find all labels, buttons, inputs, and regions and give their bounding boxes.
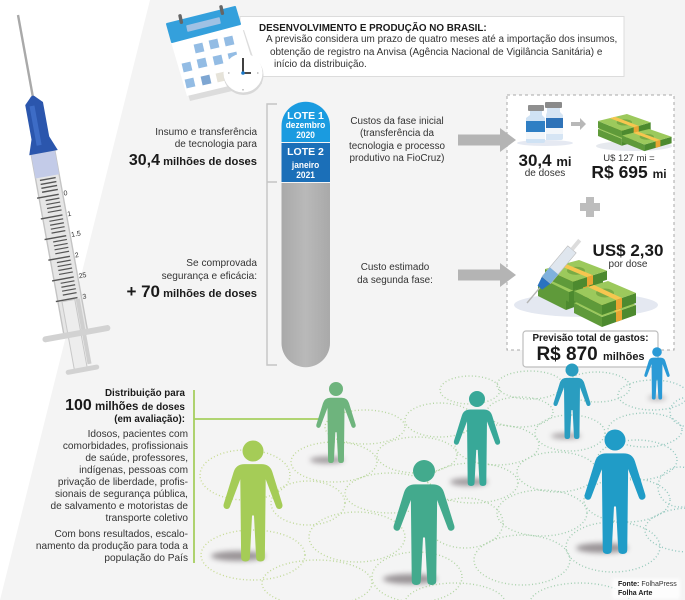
vaccine tube — [282, 102, 330, 367]
label: first phase costs: (transferência da — [360, 128, 434, 139]
arrow: second phase — [458, 263, 516, 287]
person: small blue top right — [644, 347, 670, 400]
dashed cost panel — [507, 95, 674, 350]
figure: first phase cost: R$ 695 mi — [591, 162, 667, 182]
label: first lot doses: Insumo e transferência — [155, 126, 257, 138]
figure: first phase cost — [591, 153, 667, 182]
label: second phase costs: da segunda fase: — [357, 275, 433, 286]
person: green large — [211, 440, 283, 562]
syringe — [0, 9, 117, 378]
small arrow — [571, 118, 586, 130]
figure: cost per dose: US$ 2,30 — [593, 241, 663, 260]
person: green small — [310, 382, 356, 464]
text: production scaling: Com bons resultados, escalo- — [54, 529, 188, 540]
label: second lot doses — [126, 258, 257, 301]
source: Fonte: FolhaPress — [618, 581, 677, 588]
label: first lot doses — [129, 126, 258, 168]
label: first phase costs — [349, 116, 445, 164]
figure: doses: de doses — [525, 168, 565, 179]
figure: total cost: Previsão total de gastos: — [533, 333, 648, 344]
text: priority groups: transporte coletivo — [106, 513, 188, 524]
person: blue large — [576, 430, 645, 554]
text box: development and production: DESENVOLVIMENTO E PRODUÇÃO NO BRASIL: — [259, 23, 487, 34]
label: first phase costs: produtivo na FioCruz) — [350, 153, 444, 164]
person: blue upper middle — [551, 364, 591, 439]
tube label: lot 1: LOTE 1 — [287, 110, 324, 122]
tube label: lot 2 — [287, 146, 324, 180]
figure: first phase cost: U$ 127 mi = — [603, 153, 655, 164]
tube label: lot 1: 2020 — [296, 130, 315, 141]
figure: total cost: R$ 870 milhões — [536, 344, 645, 365]
syringe: 2 — [74, 252, 80, 260]
text: priority groups: de salvamento e motoristas de — [51, 501, 188, 512]
text: production scaling: namento da produção para toda a — [36, 541, 188, 552]
tube label: lot 2: janeiro — [292, 160, 319, 171]
syringe: 3 — [82, 293, 87, 301]
icon: calendar with clock — [167, 5, 264, 101]
total cost box — [523, 331, 658, 367]
label: second phase costs — [357, 262, 433, 286]
label: first phase costs: tecnologia e processo — [349, 141, 445, 152]
tube label: lot 2: 2021 — [296, 170, 315, 180]
bracket — [267, 104, 277, 365]
syringe: 25 — [78, 272, 87, 280]
text: distribution: 100 milhões de doses — [65, 396, 185, 414]
figure: doses — [518, 151, 571, 179]
text: production scaling — [36, 529, 188, 564]
tube label: lot 2: LOTE 2 — [287, 146, 324, 158]
text: priority groups: Idosos, pacientes com — [88, 429, 188, 440]
text: production scaling: população do País — [104, 553, 188, 564]
source: Folha Arte — [618, 590, 652, 596]
tube label: lot 1: dezembro — [286, 120, 325, 131]
source background — [612, 579, 680, 599]
syringe: 1 — [67, 211, 72, 218]
tube label: lot 1 — [286, 110, 325, 141]
text box: development and production: obtenção de registro na Anvisa (Agência Nacional de Vigilância Sanitária) e — [270, 46, 602, 58]
plus sign — [580, 197, 600, 217]
text: priority groups: comorbidades, profissionais — [63, 441, 188, 452]
label: second lot doses: segurança e eficácia: — [162, 270, 257, 282]
syringe: 0 — [63, 190, 68, 198]
figure: doses: 30,4 mi — [518, 151, 571, 170]
figure: total cost — [533, 333, 648, 365]
text: priority groups — [50, 429, 188, 524]
text box: development and production — [259, 22, 617, 70]
person: teal upper — [450, 391, 500, 486]
text box: development and production: A previsão considera um prazo de quatro meses até a importação dos insumos, — [266, 34, 617, 45]
label: first lot doses: de tecnologia para — [175, 139, 257, 150]
text: distribution: (em avaliação): — [114, 414, 185, 425]
icon: vaccine vials — [517, 102, 573, 146]
syringe: 1.5 — [71, 230, 82, 239]
text box: development and production: início da distribuição. — [274, 59, 367, 70]
label: first lot doses: 30,4 milhões de doses — [129, 152, 257, 168]
text box background — [240, 16, 624, 76]
label: second phase costs: Custo estimado — [361, 262, 429, 273]
text: distribution: Distribuição para — [105, 388, 185, 399]
label: second lot doses: + 70 milhões de doses — [126, 282, 257, 301]
label: second lot doses: Se comprovada — [186, 258, 257, 269]
arrow: first phase — [458, 128, 516, 152]
text: priority groups: sionais de segurança pública, — [55, 489, 188, 500]
source — [618, 580, 677, 596]
icon: syringe over money — [514, 237, 658, 327]
text: distribution — [65, 388, 185, 425]
text: priority groups: de saúde, professores, — [85, 453, 188, 464]
label: first phase costs: Custos da fase inicial — [350, 116, 444, 127]
figure: cost per dose: por dose — [609, 259, 647, 270]
dotted network of circles — [200, 371, 685, 600]
person: teal large — [383, 460, 454, 585]
icon: money stack — [596, 114, 672, 151]
green connector — [194, 390, 320, 563]
text: priority groups: indígenas, pessoas com — [79, 465, 188, 476]
figure: cost per dose — [593, 241, 663, 270]
text: priority groups: privação de liberdade, profis- — [58, 477, 188, 488]
